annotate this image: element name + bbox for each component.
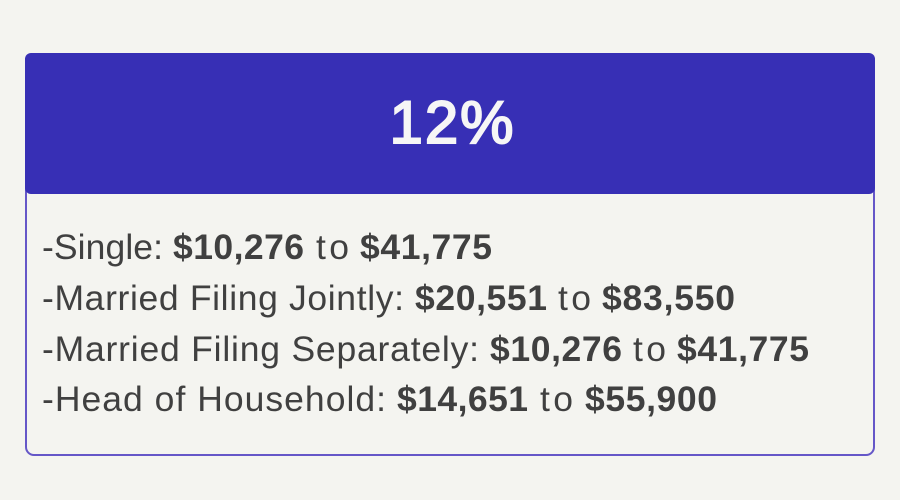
row: single (42, 227, 492, 267)
row: married filing separately: to (633, 329, 666, 369)
panel: 12% tax bracket card (25, 53, 875, 455)
row: single: to (316, 227, 349, 267)
row: married filing separately: $10,276 (490, 329, 622, 369)
row: single: -Single: (42, 227, 163, 267)
card outline (26, 54, 874, 455)
row: head of household: -Head of Household: (42, 379, 386, 419)
row: head of household: $55,900 (585, 379, 717, 419)
row: married filing jointly: $83,550 (602, 278, 735, 318)
row: married filing jointly: to (558, 278, 591, 318)
row: single: $10,276 (173, 227, 304, 267)
row: head of household: to (540, 379, 573, 419)
row: married filing separately (42, 329, 809, 369)
text block: income ranges by filing status (42, 227, 809, 419)
header band (25, 53, 875, 194)
row: married filing separately: $41,775 (677, 329, 809, 369)
row: head of household (42, 379, 717, 419)
row: married filing jointly: -Married Filing Jointly: (42, 278, 404, 318)
row: married filing separately: -Married Filing Separately: (42, 329, 479, 369)
row: head of household: $14,651 (397, 379, 528, 419)
row: single: $41,775 (360, 227, 492, 267)
heading: rate: 12% (390, 89, 514, 156)
row: married filing jointly (42, 278, 735, 318)
row: married filing jointly: $20,551 (415, 278, 547, 318)
